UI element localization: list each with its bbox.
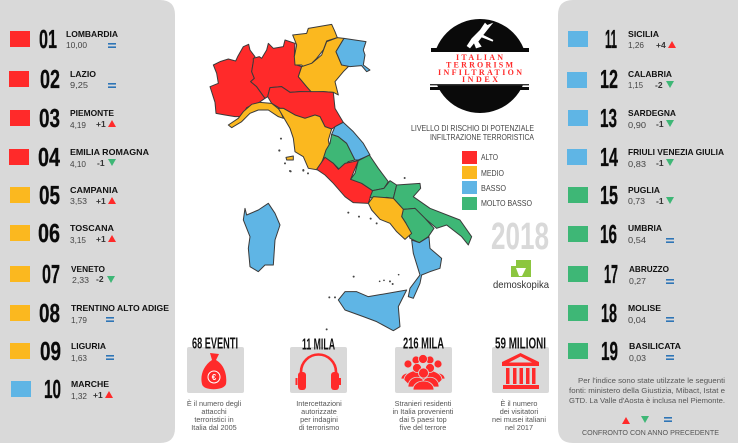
row 02 Lazio: LAZIO [70,69,96,79]
row 11 Sicilia: +4 [656,40,666,50]
row 05 Campania: 3,53 [70,196,87,206]
row 03 Piemonte [10,103,116,133]
risk legend: MEDIO [481,169,504,178]
row 07 Veneto: -2 [96,274,104,284]
icon: crowd [401,354,445,390]
logo wordmark: TERRORISM [446,60,513,70]
panel: right ranking [558,0,738,443]
logo wordmark: INFILTRATION [438,68,522,77]
sources note: GTD. La Valle d'Aosta è inclusa nel Piemonte. [569,396,725,405]
row 12 Calabria: CALABRIA [628,69,672,79]
stat: 68 eventi [187,336,244,432]
row 09 Liguria: LIGURIA [71,341,106,351]
row 14 Friuli Venezia Giulia: 14 [600,142,618,172]
logo wordmark: INDEX [462,75,498,84]
row 18 Molise: 18 [601,298,617,328]
row 09 Liguria: 1,63 [71,353,87,363]
row 02 Lazio: 9,25 [70,80,88,90]
row 18 Molise [568,298,674,328]
logo wordmark [438,53,522,84]
icon: headphones [296,354,341,390]
row 04 Emilia Romagna: -1 [97,158,105,168]
row 11 Sicilia: SICILIA [628,29,659,39]
row 12 Calabria: 12 [600,64,618,94]
stat: 68 eventi: attacchi [201,407,227,416]
row 11 Sicilia [568,24,676,54]
row 19 Basilicata: 19 [601,336,618,366]
stat: 11 mila [290,336,347,432]
stat: 216 mila: in Italia provenienti [393,407,454,416]
row 12 Calabria: 1,15 [628,80,643,90]
row 14 Friuli Venezia Giulia: FRIULI VENEZIA GIULIA [628,147,724,157]
row 04 Emilia Romagna: EMILIA ROMAGNA [70,147,149,157]
row 10 Marche [11,374,113,404]
row 12 Calabria [567,64,674,94]
row 11 Sicilia: 1,26 [628,40,644,50]
row 19 Basilicata [568,336,681,366]
row 10 Marche: 10 [44,374,61,404]
row 13 Sardegna: -1 [656,119,664,129]
stat: 11 mila: Intercettazioni [296,399,342,408]
row 06 Toscana: 06 [38,218,60,248]
row 17 Abruzzo: 17 [604,259,618,289]
legend title: INFILTRAZIONE TERRORISTICA [430,133,535,142]
sources note [569,376,725,405]
row 03 Piemonte: PIEMONTE [70,108,114,118]
row 03 Piemonte: 03 [39,103,60,133]
row 08 Trentino Alto Adige: TRENTINO ALTO ADIGE [71,303,169,313]
row 09 Liguria: 09 [40,336,61,366]
row 08 Trentino Alto Adige: 08 [39,298,60,328]
row 17 Abruzzo: 0,27 [629,276,646,286]
sources note: Per l'indice sono state utilzzate le seguenti [578,376,725,385]
risk legend: ALTO [481,153,498,162]
row 10 Marche: +1 [93,390,103,400]
northern and central regions [210,24,370,170]
stat: 68 eventi: terroristici in [194,415,234,424]
row 08 Trentino Alto Adige [10,298,169,328]
stat: 216 mila: 216 MILA [403,336,444,352]
stat: 68 eventi: 68 EVENTI [192,336,238,352]
southern regions and islands [243,150,472,331]
row 04 Emilia Romagna: 04 [38,142,60,172]
row 10 Marche: MARCHE [71,379,109,389]
icon: money bag: € [212,373,217,382]
row 06 Toscana: TOSCANA [70,223,114,233]
row 14 Friuli Venezia Giulia: -1 [656,158,664,168]
row 16 Umbria: UMBRIA [628,223,662,233]
row 04 Emilia Romagna: 4,10 [70,159,86,169]
row 15 Puglia: -1 [656,196,664,206]
row 17 Abruzzo [568,259,674,289]
row 14 Friuli Venezia Giulia: 0,83 [628,159,646,169]
row 07 Veneto: 07 [42,259,60,289]
stat: 11 mila: per indagini [300,415,338,424]
row 18 Molise: MOLISE [628,303,661,313]
row 01 Lombardia: 10,00 [66,40,87,50]
stat: 59 milioni [492,336,549,432]
row 17 Abruzzo: ABRUZZO [629,264,669,274]
row 01 Lombardia [10,24,118,54]
stat: 216 mila [393,336,454,432]
row 13 Sardegna: 0,90 [628,120,646,130]
row 06 Toscana: +1 [96,234,106,244]
icon: museum [502,353,539,389]
row 15 Puglia [568,180,674,210]
row 13 Sardegna: 13 [600,103,617,133]
stat: 216 mila: Stranieri residenti [395,399,452,408]
legend title [411,124,535,142]
row 15 Puglia: 0,73 [628,196,645,206]
stat: 216 mila: five del terrore [400,423,446,432]
comparison legend: CONFRONTO CON ANNO PRECEDENTE [582,428,719,437]
row 13 Sardegna [568,103,676,133]
row 15 Puglia: PUGLIA [628,185,660,195]
risk legend [411,124,535,210]
row 01 Lombardia: 01 [39,24,57,54]
row 16 Umbria: 0,54 [628,235,646,245]
row 12 Calabria: -2 [655,80,663,90]
row 06 Toscana [10,218,116,248]
row 03 Piemonte: +1 [96,119,106,129]
row 05 Campania: CAMPANIA [70,185,118,195]
logo: Italian Terrorism Infiltration Index [430,19,529,113]
comparison legend [582,416,719,437]
row 15 Puglia: 15 [600,180,618,210]
row 07 Veneto: VENETO [71,264,105,274]
stat: 68 eventi: Italia dal 2005 [191,423,237,432]
year 2018: 2018 [491,216,549,258]
row 02 Lazio [9,64,116,94]
map of Italy [210,24,472,331]
legend title: LIVELLO DI RISCHIO DI POTENZIALE [411,124,534,133]
panel: left ranking [0,0,175,443]
risk legend: BASSO [481,184,506,193]
row 14 Friuli Venezia Giulia [567,142,724,172]
stat: 59 milioni: nel 2017 [505,423,533,432]
row 10 Marche: 1,32 [71,391,87,401]
stat: 11 mila: autorizzate [301,407,337,416]
Tuscan archipelago islets [278,138,304,172]
stat: 216 mila: dai 5 paesi top [399,415,447,424]
icon: rifle [467,23,493,48]
stat: 59 milioni: È il numero [501,399,537,408]
row 07 Veneto: 2,33 [72,275,89,285]
stat: 11 mila: 11 MILA [302,336,335,354]
row 07 Veneto [10,259,115,289]
stat: 59 milioni: nei musei italiani [492,415,546,424]
row 11 Sicilia: 11 [605,24,617,54]
row 04 Emilia Romagna [9,142,149,172]
row 06 Toscana: 3,15 [70,235,86,245]
row 05 Campania [10,180,118,210]
row 05 Campania: +1 [96,196,106,206]
row 19 Basilicata: 0,03 [629,353,646,363]
row 16 Umbria [568,219,674,249]
row 03 Piemonte: 4,19 [70,120,86,130]
stat: 11 mila: di terrorismo [299,423,339,432]
logo wordmark: ITALIAN [456,53,503,62]
sources note: fonti: ministero della Giustizia, Mibact, Istat e [569,386,725,395]
row 18 Molise: 0,04 [628,315,646,325]
row 02 Lazio: 02 [40,64,60,94]
row 05 Campania: 05 [39,180,60,210]
logo: demoskopika: demoskopika [493,279,549,291]
stat: 68 eventi: È il numero degli [187,399,242,408]
risk legend: MOLTO BASSO [481,199,532,208]
logo: demoskopika [493,260,549,291]
row 01 Lombardia: LOMBARDIA [66,29,118,39]
row 19 Basilicata: BASILICATA [629,341,681,351]
row 16 Umbria: 16 [600,219,617,249]
stat: 59 milioni: 59 MILIONI [495,336,546,352]
row 13 Sardegna: SARDEGNA [628,108,676,118]
row 08 Trentino Alto Adige: 1,79 [71,315,87,325]
stat: 59 milioni: dei visitatori [500,407,539,416]
row 09 Liguria [10,336,114,366]
